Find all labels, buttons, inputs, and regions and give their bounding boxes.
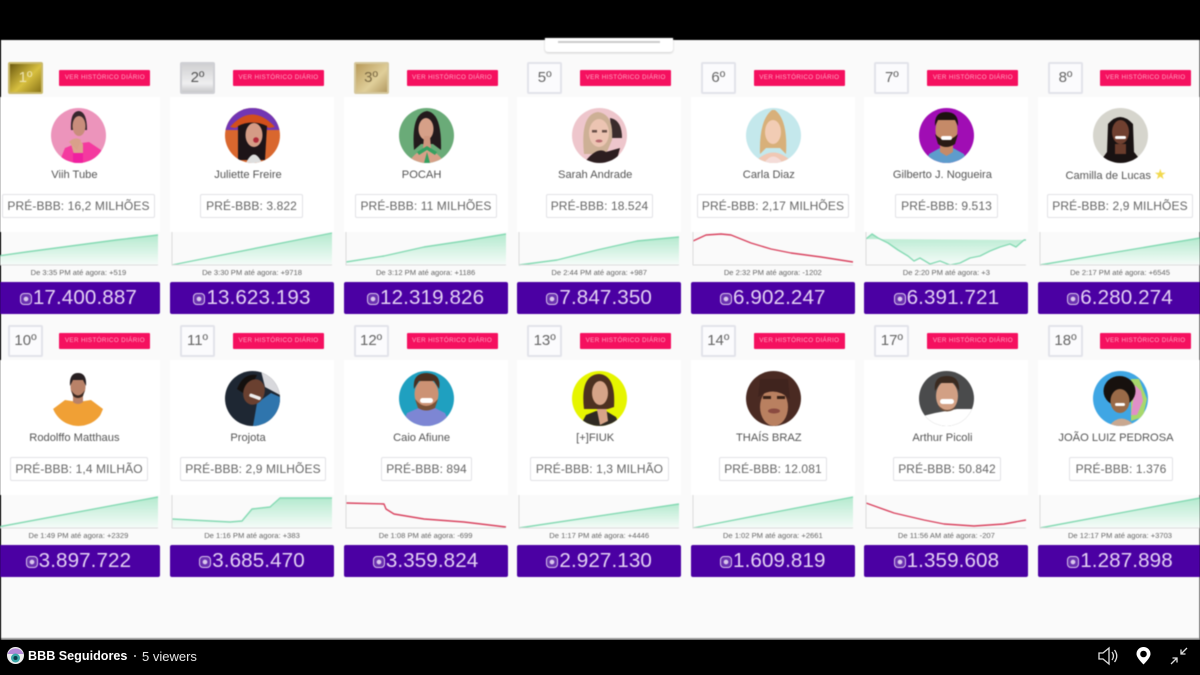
pre-BBB count: PRÉ-BBB: 3.822 [206,199,297,213]
history button: VER HISTÓRICO DIÁRIO [759,74,839,81]
follower count: 3.685.470 [212,549,305,572]
name: Juliette Freire [214,169,282,181]
follower count [864,545,1028,576]
profile panel [0,97,160,232]
rank badge [8,325,43,357]
history button: VER HISTÓRICO DIÁRIO [1105,337,1186,344]
profile panel [691,360,855,495]
rank badge [701,325,736,357]
rank badge: 17º [881,332,903,349]
follower count: 1.609.819 [733,549,826,572]
follower count: 3.897.722 [39,549,131,572]
time delta: De 2:20 PM até agora: +3 [903,268,990,276]
history button [1100,70,1191,86]
history button: VER HISTÓRICO DIÁRIO [65,74,145,81]
name: THAÍS BRAZ [736,432,802,444]
growth line chart [171,232,333,266]
follower count: 6.280.274 [1080,286,1173,309]
growth line chart [518,232,680,266]
history button: VER HISTÓRICO DIÁRIO [238,74,319,81]
follower count [0,282,160,314]
icon: channel avatar [7,647,24,664]
rank badge [180,62,215,94]
profile panel [1038,360,1200,495]
pre-BBB count [10,457,148,481]
pre-BBB count [1069,457,1173,481]
history button [927,333,1018,349]
time delta: De 1:08 PM até agora: -699 [379,530,472,540]
history button: VER HISTÓRICO DIÁRIO [933,74,1013,81]
history button: VER HISTÓRICO DIÁRIO [1105,74,1186,81]
card: Rodolffo Matthaus [0,325,161,578]
growth line chart [1039,232,1200,266]
follower count [170,282,334,314]
history button [754,70,845,86]
avatar [398,370,455,427]
pre-BBB count [381,457,472,481]
pre-BBB count: PRÉ-BBB: 1,3 MILHÃO [536,462,663,476]
follower count [691,545,855,576]
pre-BBB count: PRÉ-BBB: 9.513 [901,199,992,213]
pre-BBB count [355,194,497,218]
history button [754,333,845,349]
follower count: 7.847.350 [559,286,652,309]
pre-BBB count [893,457,1001,481]
profile panel [691,97,855,232]
history button: VER HISTÓRICO DIÁRIO [238,337,319,344]
name: JOÃO LUIZ PEDROSA [1058,432,1174,444]
follower count: 1.359.608 [907,549,999,572]
growth line chart [345,232,507,266]
pre-BBB count [1047,194,1193,218]
rank badge [527,62,562,94]
avatar [918,107,975,164]
card: Arthur Picoli [863,325,1029,578]
card: Caio Afiune [343,325,509,578]
decline line chart [345,495,507,529]
history button [1100,333,1191,349]
pre-BBB count: PRÉ-BBB: 18.524 [551,199,648,213]
rank badge: 5º [538,69,552,86]
avatar [224,107,281,164]
follower count: 2.927.130 [559,549,652,572]
rank badge [354,325,389,357]
avatar [746,108,802,164]
history button [407,333,498,349]
name with star: Camilla de Lucas ★ [1065,166,1167,182]
time delta: De 2:44 PM até agora: +987 [551,268,647,276]
time delta: De 3:30 PM até agora: +9718 [202,268,302,276]
card: [+]FIUK [516,325,682,578]
time delta: De 1:17 PM até agora: +4446 [549,530,649,540]
growth line chart [518,495,680,530]
follower count [344,545,508,576]
follower count [0,545,160,576]
profile panel [1038,97,1200,232]
card: POCAH [343,62,509,315]
avatar [50,107,107,164]
card: Gilberto J. Nogueira [863,62,1029,315]
card: Sarah Andrade [516,62,682,315]
pre-BBB count [895,194,998,218]
bottom player bar [0,640,1200,675]
rank badge [1048,62,1083,94]
follower count [344,282,508,314]
pre-BBB count: PRÉ-BBB: 894 [386,462,467,476]
avatar [745,370,802,427]
pre-BBB count: PRÉ-BBB: 11 MILHÕES [360,199,492,213]
time delta: De 11:56 AM até agora: -207 [898,530,995,540]
history button [233,70,324,86]
pre-BBB count: PRÉ-BBB: 2,17 MILHÕES [702,199,844,213]
card: THAÍS BRAZ [690,325,856,578]
icon: location pin [1136,647,1151,665]
rank badge: 12º [360,332,382,349]
card: João Luiz Pedrosa [1038,325,1200,576]
follower count: 3.359.824 [386,549,478,572]
rank badge [1048,325,1083,357]
rank badge [354,62,389,94]
rank badge [701,62,736,94]
pre-BBB count [180,457,326,481]
top search box fragment [545,38,673,52]
rank badge [874,62,909,94]
avatar [1093,371,1148,426]
pre-BBB count: PRÉ-BBB: 12.081 [724,462,822,476]
follower count [517,545,681,576]
history button [580,70,671,86]
rank badge [8,62,43,94]
avatar [224,370,281,427]
name: Gilberto J. Nogueira [893,169,992,181]
follower count: 12.319.826 [380,286,484,309]
channel name: BBB Seguidores [28,649,127,663]
card: Juliette Freire [169,62,335,315]
name: Arthur Picoli [912,432,972,444]
avatar [1092,108,1148,164]
viewer count: 5 viewers [142,649,197,664]
rank badge: 6º [711,69,725,86]
time delta: De 1:16 PM até agora: +383 [204,530,300,540]
avatar [398,107,455,164]
profile panel [864,97,1028,232]
name: Sarah Andrade [558,169,632,181]
name: Carla Diaz [743,169,795,181]
rank badge [874,325,909,357]
pre-BBB count [2,194,155,218]
rank badge: 11º [187,332,208,349]
name: POCAH [402,169,441,181]
time delta: De 1:02 PM até agora: +2661 [723,530,823,540]
time delta: De 3:35 PM até agora: +519 [31,268,126,276]
follower count [170,545,334,576]
rank badge: 1º [19,69,32,86]
follower count [517,282,681,314]
time delta: De 12:17 PM até agora: +3703 [1068,530,1172,540]
name: Rodolffo Matthaus [29,432,120,444]
pre-BBB count [697,194,849,218]
rank badge: 10º [14,332,37,349]
name: [+]FIUK [576,432,614,444]
follower count: 1.287.898 [1080,549,1173,572]
viewer separator dot [134,654,136,656]
rank badge: 7º [885,69,899,86]
name: Caio Afiune [393,432,450,444]
pre-BBB count: PRÉ-BBB: 1.376 [1076,462,1166,476]
profile panel [0,360,160,495]
avatar [52,372,104,427]
rank badge: 13º [534,332,556,349]
pre-BBB count [546,194,653,218]
follower count [864,282,1028,314]
profile panel [170,97,334,232]
name: Projota [230,432,266,444]
card: Camilla de Lucas [1037,62,1200,315]
rank badge: 3º [364,69,378,86]
growth line chart [171,495,333,529]
pre-BBB count [200,194,303,218]
follower count: 6.391.721 [907,286,999,309]
rank badge [180,325,215,357]
history button [407,70,498,86]
card: Projota [169,325,335,578]
follower count: 13.623.193 [206,286,311,309]
history button: VER HISTÓRICO DIÁRIO [65,337,145,344]
pre-BBB count: PRÉ-BBB: 1,4 MILHÃO [15,462,143,476]
profile panel [517,97,681,232]
history button [233,333,324,349]
history button [59,70,150,86]
fluctuating line chart [865,232,1026,266]
pre-BBB count [719,457,827,481]
icon: minimize arrows [1170,647,1188,665]
history button [580,333,671,349]
pre-BBB count: PRÉ-BBB: 2,9 MILHÕES [185,462,321,476]
history button: VER HISTÓRICO DIÁRIO [412,74,492,81]
decline line chart [865,495,1027,529]
history button: VER HISTÓRICO DIÁRIO [933,337,1013,344]
follower count [691,282,855,314]
pre-BBB count: PRÉ-BBB: 2,9 MILHÕES [1052,199,1188,213]
profile panel [517,360,681,495]
history button: VER HISTÓRICO DIÁRIO [586,74,666,81]
name: Viih Tube [51,169,98,181]
rank badge: 2º [191,69,204,86]
follower count: 17.400.887 [33,286,137,309]
rank badge: 8º [1059,69,1072,86]
history button: VER HISTÓRICO DIÁRIO [759,337,839,344]
history button [59,333,150,349]
pre-BBB count: PRÉ-BBB: 50.842 [898,462,996,476]
time delta: De 2:32 PM até agora: -1202 [724,268,822,276]
follower count [1038,282,1200,314]
rank badge: 18º [1054,332,1077,349]
follower count [1038,545,1200,576]
card: Viih Tube [0,61,161,315]
profile panel [170,360,334,495]
avatar [918,370,975,426]
history button: VER HISTÓRICO DIÁRIO [412,337,492,344]
pre-BBB count: PRÉ-BBB: 16,2 MILHÕES [7,199,150,213]
rank badge [527,325,562,357]
profile panel [344,97,508,232]
follower count: 6.902.247 [733,286,826,309]
time delta: De 1:49 PM até agora: +2329 [28,530,128,540]
icon: speaker [1098,646,1120,666]
card: Carla Diaz [690,62,856,315]
history button [927,70,1018,86]
time delta: De 2:17 PM até agora: +6545 [1070,268,1170,276]
avatar [571,370,628,427]
avatar [572,108,628,164]
rank badge: 14º [707,332,729,349]
growth line chart [1038,495,1200,529]
decline line chart [692,232,854,266]
growth line chart [692,495,854,529]
growth line chart [0,496,159,530]
profile panel [864,360,1028,495]
time delta: De 3:12 PM até agora: +1186 [376,268,475,276]
history button: VER HISTÓRICO DIÁRIO [586,337,666,344]
growth line chart [0,234,159,266]
profile panel [344,360,508,495]
pre-BBB count [530,457,669,481]
